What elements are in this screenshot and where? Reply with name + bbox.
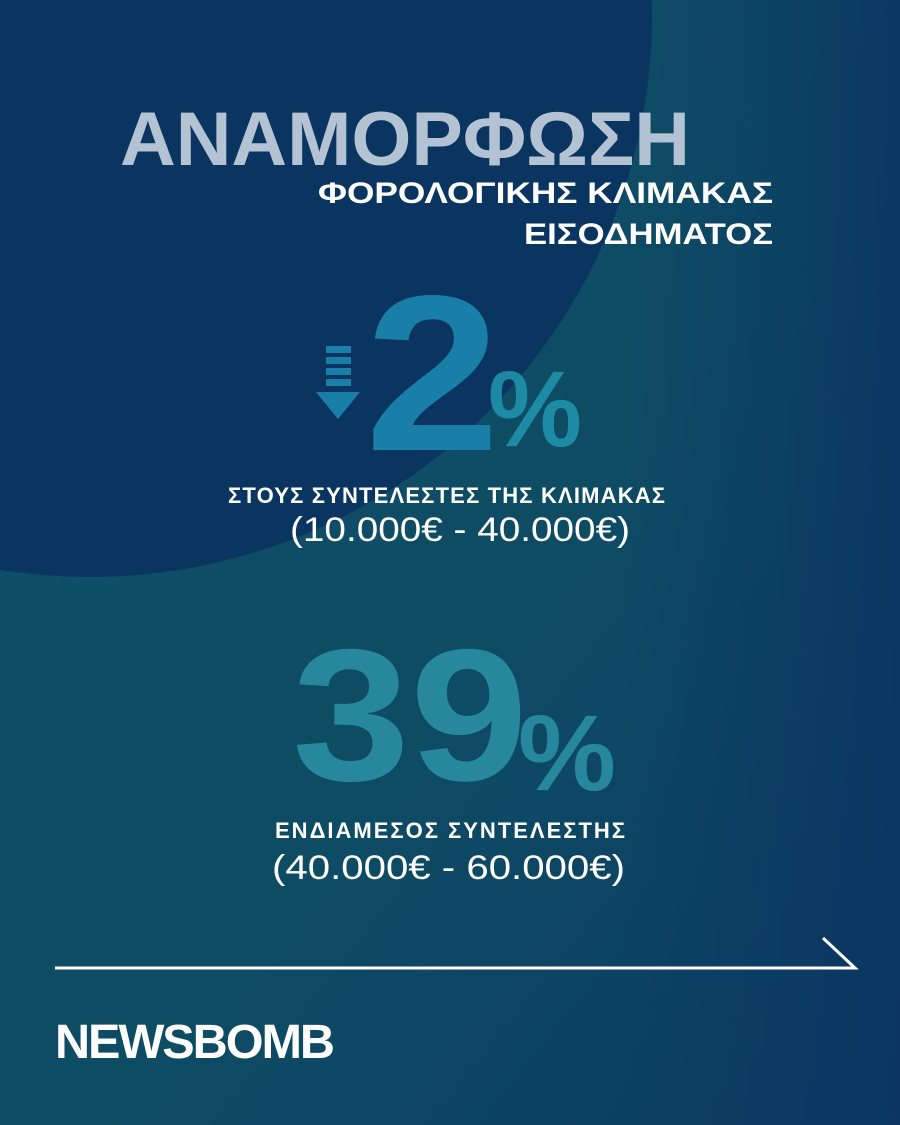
stat: 39% — [292, 610, 616, 820]
stat: 39%: % — [518, 692, 616, 813]
title: ΑΝΑΜΟΡΦΩΣΗ — [120, 97, 690, 182]
label: 39% — [272, 818, 625, 887]
arrow line — [55, 938, 855, 968]
subtitle: ΕΙΣΟΔΗΜΑΤΟΣ — [524, 218, 773, 251]
subtitle: ΦΟΡΟΛΟΓΙΚΗΣ ΚΛΙΜΑΚΑΣ — [318, 177, 773, 210]
stat: 2%: 2 — [365, 250, 500, 498]
logo: NEWSBOMB: NEWSBOMB — [55, 1016, 333, 1069]
label: 2%: (10.000€ - 40.000€) — [290, 511, 630, 549]
label: 2% — [228, 483, 665, 549]
label: 39%: ΕΝΔΙΑΜΕΣΟΣ ΣΥΝΤΕΛΕΣΤΗΣ — [275, 818, 625, 843]
stat: 2%: % — [488, 348, 582, 469]
stat: 39%: 39 — [292, 610, 528, 820]
subtitle — [318, 177, 773, 251]
label: 39%: (40.000€ - 60.000€) — [272, 849, 625, 887]
icon: down arrow — [316, 346, 360, 419]
label: 2%: ΣΤΟΥΣ ΣΥΝΤΕΛΕΣΤΕΣ ΤΗΣ ΚΛΙΜΑΚΑΣ — [228, 483, 665, 508]
stat: 2% — [316, 250, 582, 498]
